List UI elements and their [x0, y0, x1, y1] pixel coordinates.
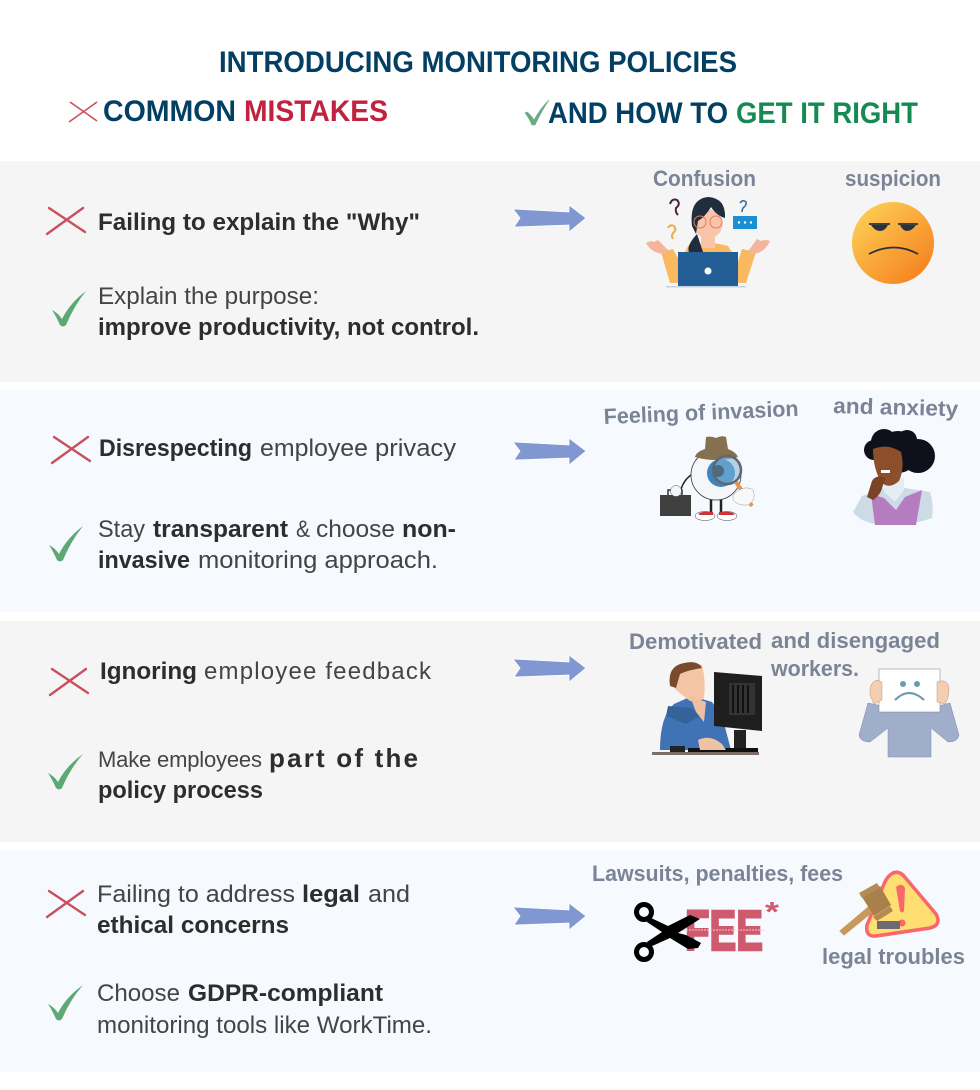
label: and disengaged workers: workers. [770, 656, 859, 681]
mistake text: Failing to address [97, 881, 295, 908]
icon: tired man at computer [652, 662, 762, 755]
icon: detective eye [660, 436, 754, 520]
icon: scissors cutting fee [636, 896, 779, 963]
label: and anxiety: and anxiety [833, 393, 959, 421]
icon: red cross [47, 208, 85, 234]
panel: ignoring feedback [0, 621, 980, 842]
icon: green check [49, 526, 83, 562]
heading: how to get it right: GET IT RIGHT [736, 97, 918, 130]
arrow [513, 438, 586, 465]
fix text: part of the [269, 743, 418, 773]
fix text: choose [316, 516, 395, 543]
mistake text: and [368, 881, 410, 908]
icon: anxious woman [853, 429, 935, 525]
mistake text: legal [302, 881, 360, 908]
label: and disengaged workers: and disengaged [771, 628, 940, 653]
fix text: Choose [97, 980, 180, 1007]
title: INTRODUCING MONITORING POLICIES [219, 46, 737, 79]
fix text [98, 283, 479, 341]
icon: warning sign and gavel [840, 872, 938, 936]
fix text: monitoring tools like WorkTime. [97, 1012, 432, 1039]
icon: red cross [52, 437, 90, 463]
panel: legal and ethical concerns [0, 850, 980, 1072]
fix text: transparent [153, 516, 288, 543]
icon: green check [48, 985, 83, 1020]
icon: suspicious emoji [852, 202, 934, 284]
label: legal troubles: legal troubles [822, 944, 965, 969]
fix text: GDPR-compliant [188, 980, 383, 1007]
fix text: Explain the purpose: [98, 283, 319, 310]
icon: green check [52, 291, 86, 326]
fix text: non- [402, 516, 456, 543]
heading: how to get it right [525, 97, 918, 130]
icon: red cross [50, 669, 88, 695]
label: feeling of invasion: Feeling of invasion [603, 396, 799, 429]
fix text: & [296, 516, 310, 543]
mistake text: privacy [375, 435, 456, 462]
fix text: monitoring approach. [198, 547, 438, 574]
icon: confused woman at laptop [646, 197, 770, 288]
label: demotivated: Demotivated [629, 629, 762, 654]
mistake text [97, 881, 410, 939]
fix text: Make employees [98, 747, 262, 772]
icon: person holding sad face sign [859, 669, 959, 757]
panel: failing to explain why [0, 161, 980, 382]
icon: scissors cutting fee: FEE [685, 899, 763, 963]
mistake text: Ignoring [100, 658, 197, 685]
label: suspicion: suspicion [845, 166, 941, 191]
icon: scissors cutting fee: * [765, 896, 779, 927]
mistake text [99, 435, 456, 462]
arrow [513, 205, 586, 232]
fix text: Stay [98, 516, 145, 543]
mistake text: Disrespecting [99, 435, 252, 462]
mistake text [100, 658, 432, 685]
arrow [513, 903, 586, 930]
icon: green check [48, 754, 83, 790]
mistake text: employee feedback [204, 658, 432, 685]
fix text [98, 516, 456, 574]
heading: how to get it right: AND HOW TO [548, 97, 728, 130]
fix text [97, 980, 432, 1039]
mistake text: ethical concerns [97, 912, 289, 939]
heading: common mistakes: MISTAKES [244, 95, 388, 128]
fix text: invasive [98, 547, 190, 574]
fix text [98, 743, 418, 804]
heading: common mistakes [69, 95, 388, 128]
icon: red cross [47, 891, 85, 917]
heading: common mistakes: COMMON [103, 95, 236, 128]
arrow [513, 655, 586, 682]
mistake text: Failing to explain the "Why" [98, 209, 420, 236]
label: lawsuits penalties fees: Lawsuits, penalties, fees [592, 861, 843, 886]
mistake text: employee [260, 435, 368, 462]
fix text: policy process [98, 777, 263, 804]
label: confusion: Confusion [653, 166, 756, 191]
label: and disengaged workers [770, 628, 940, 681]
fix text: improve productivity, not control. [98, 314, 479, 341]
panel: disrespecting privacy [0, 390, 980, 612]
